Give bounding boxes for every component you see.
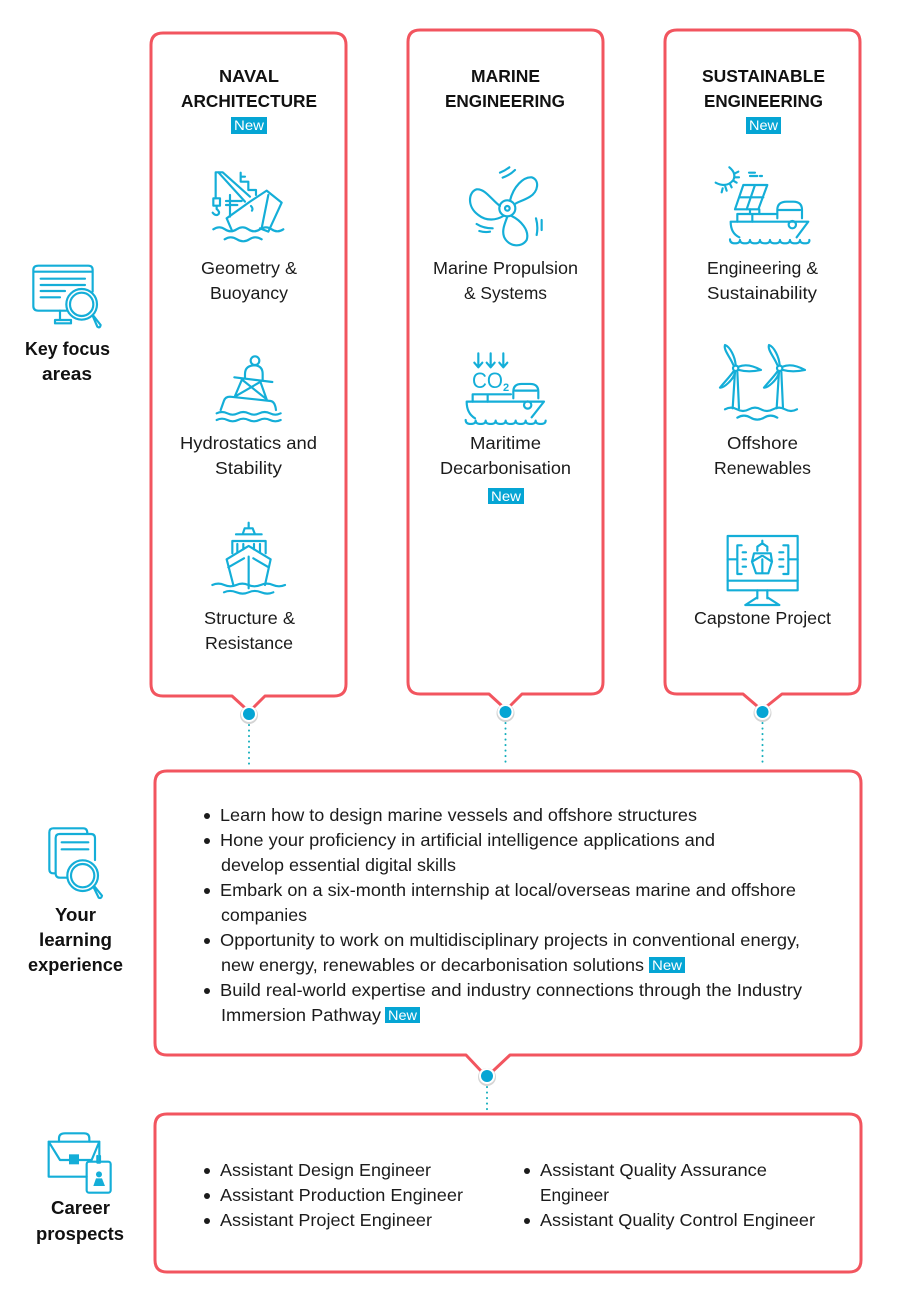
heading: career prospects: prospects: [36, 1224, 124, 1244]
icon: capstone monitor: [728, 536, 798, 605]
section label: key focus areas: [25, 266, 110, 384]
new badge: New: [491, 488, 522, 504]
heading: sustainable engineering: [702, 66, 825, 111]
label: hydrostatics and stability: Hydrostatics and: [180, 433, 317, 453]
panel: learning experience: [155, 771, 861, 1072]
icon: buoy: [217, 356, 281, 421]
label: geometry and buoyancy: [201, 258, 297, 303]
section label: career prospects: [36, 1133, 124, 1244]
bullet 4: Opportunity to work on multidisciplinary projects in conventional energy,: [220, 930, 800, 950]
heading: career prospects: Career: [51, 1198, 110, 1218]
bullet 4: new energy, renewables or decarbonisation solutions: [221, 955, 644, 975]
heading: marine engineering: ENGINEERING: [445, 91, 565, 111]
label: engineering and sustainability: [707, 258, 818, 303]
label: marine propulsion and systems: [433, 258, 578, 303]
heading: your learning experience: learning: [39, 930, 112, 950]
label: engineering and sustainability: Sustainability: [707, 283, 817, 303]
career list: left column: Assistant Production Engineer: [220, 1185, 463, 1205]
heading: key focus areas: [25, 339, 110, 384]
heading: naval architecture: [181, 66, 317, 111]
panel: marine engineering: [408, 30, 603, 705]
career list: left column: Assistant Design Engineer: [220, 1160, 431, 1180]
label: hydrostatics and stability: [180, 433, 317, 478]
icon: monitor with magnifier: [33, 266, 101, 327]
panel: career prospects: [155, 1114, 861, 1272]
bullet 5: [204, 980, 802, 1025]
icon: briefcase with ID badge: [49, 1133, 111, 1193]
bullet 2: develop essential digital skills: [221, 855, 456, 875]
bullet 4: New: [652, 957, 683, 973]
heading: career prospects: [36, 1198, 124, 1244]
connector: marine engineering: [496, 704, 514, 767]
bullet 3: [204, 880, 796, 925]
new badge: New: [234, 117, 265, 133]
icon: front view ship: [212, 523, 285, 594]
label: geometry and buoyancy: Geometry &: [201, 258, 297, 278]
icon: decarbonised ship: [466, 353, 546, 424]
panel outline: [155, 1114, 861, 1272]
heading: key focus areas: areas: [42, 364, 92, 384]
connector: learning to career: [478, 1068, 496, 1113]
icon: documents with magnifier: [49, 828, 102, 898]
label: engineering and sustainability: Engineering &: [707, 258, 818, 278]
ship and arrows: [466, 353, 546, 424]
new badge: New: [749, 117, 779, 133]
career list: right column: [524, 1160, 815, 1230]
bullet 2: [204, 830, 715, 875]
heading: your learning experience: [28, 905, 123, 975]
heading: marine engineering: MARINE: [471, 66, 540, 86]
CO2 subscript: 2: [503, 382, 509, 394]
label: offshore renewables: Offshore: [727, 433, 798, 453]
icon: propeller: [470, 167, 542, 245]
heading: your learning experience: experience: [28, 955, 123, 975]
label: structure and resistance: Structure &: [204, 608, 295, 628]
label: maritime decarbonisation: Decarbonisation: [440, 458, 571, 478]
panel: sustainable engineering: [665, 30, 860, 706]
heading: sustainable engineering: SUSTAINABLE: [702, 66, 825, 86]
label: maritime decarbonisation: Maritime: [470, 433, 541, 453]
label: offshore renewables: Renewables: [714, 458, 811, 478]
heading: naval architecture: NAVAL: [219, 66, 279, 86]
label: structure and resistance: Resistance: [205, 633, 293, 653]
panel outline: [151, 33, 346, 707]
label: hydrostatics and stability: Stability: [215, 458, 282, 478]
heading: naval architecture: ARCHITECTURE: [181, 91, 317, 111]
panel outline: [155, 771, 861, 1072]
bullet 2: Hone your proficiency in artificial intelligence applications and: [220, 830, 715, 850]
heading: key focus areas: Key focus: [25, 339, 110, 359]
bullet 5: Build real-world expertise and industry connections through the Industry: [220, 980, 802, 1000]
panel outline: [665, 30, 860, 706]
CO2 lettering: CO: [472, 368, 503, 393]
bullet 3: Embark on a six-month internship at local/overseas marine and offshore: [220, 880, 796, 900]
career list: right column: Assistant Quality Control Engineer: [540, 1210, 815, 1230]
label: structure and resistance: [204, 608, 295, 653]
section label: your learning experience: [28, 828, 123, 975]
icon: offshore wind turbines: [720, 345, 805, 420]
bullet list: [204, 805, 802, 1025]
panel outline: [408, 30, 603, 705]
label: offshore renewables: [714, 433, 811, 478]
heading: marine engineering: [445, 66, 565, 111]
connector: sustainable engineering: [754, 704, 772, 767]
career list: left column: Assistant Project Engineer: [220, 1210, 432, 1230]
career list: right column: Assistant Quality Assurance: [540, 1160, 767, 1180]
career list: left column: [204, 1160, 463, 1230]
icon: ship with crane: [213, 172, 283, 241]
icon: solar ship: [716, 167, 809, 243]
bullet 5: New: [388, 1007, 418, 1023]
label: marine propulsion and systems: Marine Propulsion: [433, 258, 578, 278]
panel: naval architecture: [151, 33, 346, 707]
label: marine propulsion and systems: & Systems: [464, 283, 547, 303]
career list: right column: Engineer: [540, 1185, 609, 1205]
label: geometry and buoyancy: Buoyancy: [210, 283, 288, 303]
heading: your learning experience: Your: [55, 905, 96, 925]
bullet 5: Immersion Pathway: [221, 1005, 381, 1025]
bullet 3: companies: [221, 905, 307, 925]
heading: sustainable engineering: ENGINEERING: [704, 91, 823, 111]
bullet 4: [204, 930, 800, 975]
bullet 1: Learn how to design marine vessels and offshore structures: [220, 805, 697, 825]
label: maritime decarbonisation: [440, 433, 571, 478]
label: capstone project: Capstone Project: [694, 608, 831, 628]
connector: naval architecture: [240, 706, 258, 768]
